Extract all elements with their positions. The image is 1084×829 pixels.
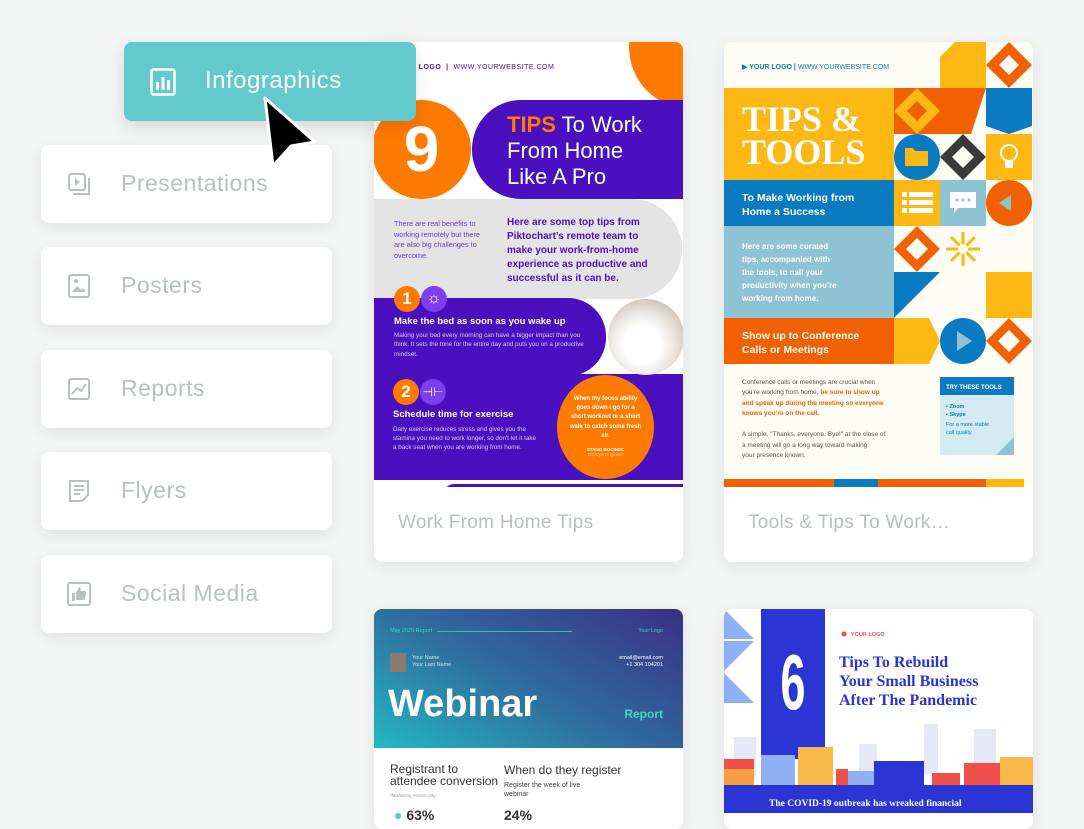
big 9 [372, 100, 471, 199]
quote circle: When my focus ability goes down I go for a short workout or a short walk to catch some fresh air. [570, 396, 641, 439]
icon: chart [150, 68, 176, 96]
menu item: flyers [41, 452, 332, 530]
poster image: a meeting will go a long way toward making [742, 442, 868, 449]
tip 2: 2 [401, 382, 411, 401]
webinar title: Webinar [388, 683, 537, 725]
poster image: your presence known. [742, 452, 806, 459]
tip 2 [393, 379, 536, 451]
menu item: posters: Posters [121, 272, 202, 298]
tab: infographics (active): Infographics [205, 67, 342, 94]
tip 2: Schedule time for exercise [393, 409, 513, 420]
card: webinar report [374, 609, 683, 829]
tip 1: Making your bed every morning can have a bigger impact than you think. It sets the tone for the entire day and puts you on a productive mindset. [394, 332, 584, 358]
menu item: reports [41, 350, 332, 428]
poster image: ▶ YOUR LOGO | WWW.YOURWEBSITE.COM [741, 64, 889, 71]
poster image: you’re working from home, be sure to show up [742, 389, 880, 396]
poster image: For a more stable [946, 422, 989, 428]
poster image: Here are some top tips from Piktochart’s remote team to make your work-from-home experience as productive and successful as it can be. [507, 217, 648, 284]
gradient header: Report [624, 707, 663, 721]
tab: infographics (active) [124, 42, 416, 121]
quote circle: DevOps Engineer [588, 452, 623, 457]
card: 6 tips rebuild: After The Pandemic [839, 692, 977, 709]
card: 6 tips rebuild: Your Small Business [839, 673, 978, 690]
poster image: productivity when you’re [742, 281, 837, 290]
card: webinar report: ● 63% [394, 807, 434, 823]
purple tips block [374, 298, 606, 376]
tip 2: Daily exercise reduces stress and gives you the stamina you need to work longer, so don't let it take a back seat when you are working from home. [393, 426, 536, 451]
intro band [314, 199, 682, 299]
poster image: the tools, to nail your [742, 268, 823, 277]
poster image: To Make Working from [742, 192, 854, 204]
label: Tools & Tips To Work… [748, 512, 950, 533]
gradient header: +1 304 104201 [626, 662, 663, 668]
label: Work From Home Tips [398, 512, 593, 533]
poster image: A simple, "Thanks, everyone. Bye!" at the close of [742, 431, 886, 438]
card: 6 tips rebuild: 6 [780, 641, 806, 726]
poster image: There are real benefits to working remotely but there are also big challenges to overcome. [394, 219, 480, 260]
poster image: ▪ Skype [946, 412, 966, 418]
menu item: presentations: Presentations [121, 170, 268, 196]
gradient header: May 2020 Report [390, 628, 432, 634]
quote circle: STANO BOCINEC [587, 447, 624, 452]
poster image: TIPS & [742, 99, 861, 139]
tiles [940, 42, 986, 88]
stats: Registrant to [390, 762, 458, 776]
card: 6 tips rebuild: YOUR LOGO [851, 632, 885, 638]
tip 1: ☼ [427, 290, 441, 307]
tip 1: Make the bed as soon as you wake up [394, 316, 566, 327]
menu item: presentations [41, 145, 332, 223]
logo text: YOUR LOGO | WWW.YOURWEBSITE.COM [394, 64, 554, 71]
poster image: ▪ Zoom [946, 404, 965, 410]
title pill: TIPS To Work [507, 112, 642, 137]
card: webinar report: When do they register [504, 763, 621, 777]
card: webinar report: 24% [504, 807, 532, 823]
card: webinar report: webinar [504, 791, 529, 798]
title pill [472, 100, 702, 199]
stats [390, 762, 498, 788]
gradient header [374, 609, 683, 748]
gradient header: Your Name [412, 655, 439, 661]
card: 6 tips rebuild [724, 609, 1033, 829]
poster image: TOOLS [742, 132, 865, 172]
title pill: Like A Pro [507, 164, 606, 189]
tip 2: ⊣⊢ [423, 385, 443, 399]
poster image [374, 42, 683, 487]
gradient header: email@email.com [619, 655, 663, 661]
card: 6 tips rebuild: Tips To Rebuild [839, 654, 948, 671]
gradient header: Your Last Name [412, 662, 451, 668]
poster image: and speak up during the meeting so everyone [742, 400, 884, 407]
card: webinar report: Register the week of live [504, 782, 580, 789]
tip 1: 1 [402, 289, 412, 308]
card: webinar report: *Marketing events only [390, 793, 436, 798]
gradient header: Your Logo [638, 628, 663, 634]
poster image: Home a Success [742, 206, 826, 218]
stats: attendee conversion [390, 774, 498, 788]
menu item: social media: Social Media [121, 580, 259, 606]
card: work from home tips [374, 42, 683, 562]
poster image: TRY THESE TOOLS [946, 385, 1002, 391]
quote circle [557, 375, 654, 479]
poster image: knows you’re on the call. [742, 410, 819, 417]
menu item: social media [41, 555, 332, 633]
poster image: Conference calls or meetings are crucial when [742, 379, 876, 386]
poster image: call quality. [946, 430, 973, 436]
poster image: Calls or Meetings [742, 344, 829, 356]
card: 6 tips rebuild: The COVID-19 outbreak has wreaked financial [769, 799, 962, 809]
title pill: From Home [507, 138, 623, 163]
menu item: reports: Reports [121, 375, 205, 401]
card: tools & tips [724, 42, 1033, 562]
menu item: flyers: Flyers [121, 477, 187, 503]
icon: cursor arrow [264, 96, 316, 162]
poster image: tips, accompanied with [742, 255, 830, 264]
poster image: Show up to Conference [742, 330, 859, 342]
menu item: posters [41, 247, 332, 325]
photo circle [608, 299, 684, 375]
tip 1 [394, 286, 584, 358]
poster image [724, 42, 1033, 487]
poster image: working from home. [741, 294, 818, 303]
big 9: 9 [404, 113, 439, 185]
poster image: Here are some curated [742, 242, 828, 251]
